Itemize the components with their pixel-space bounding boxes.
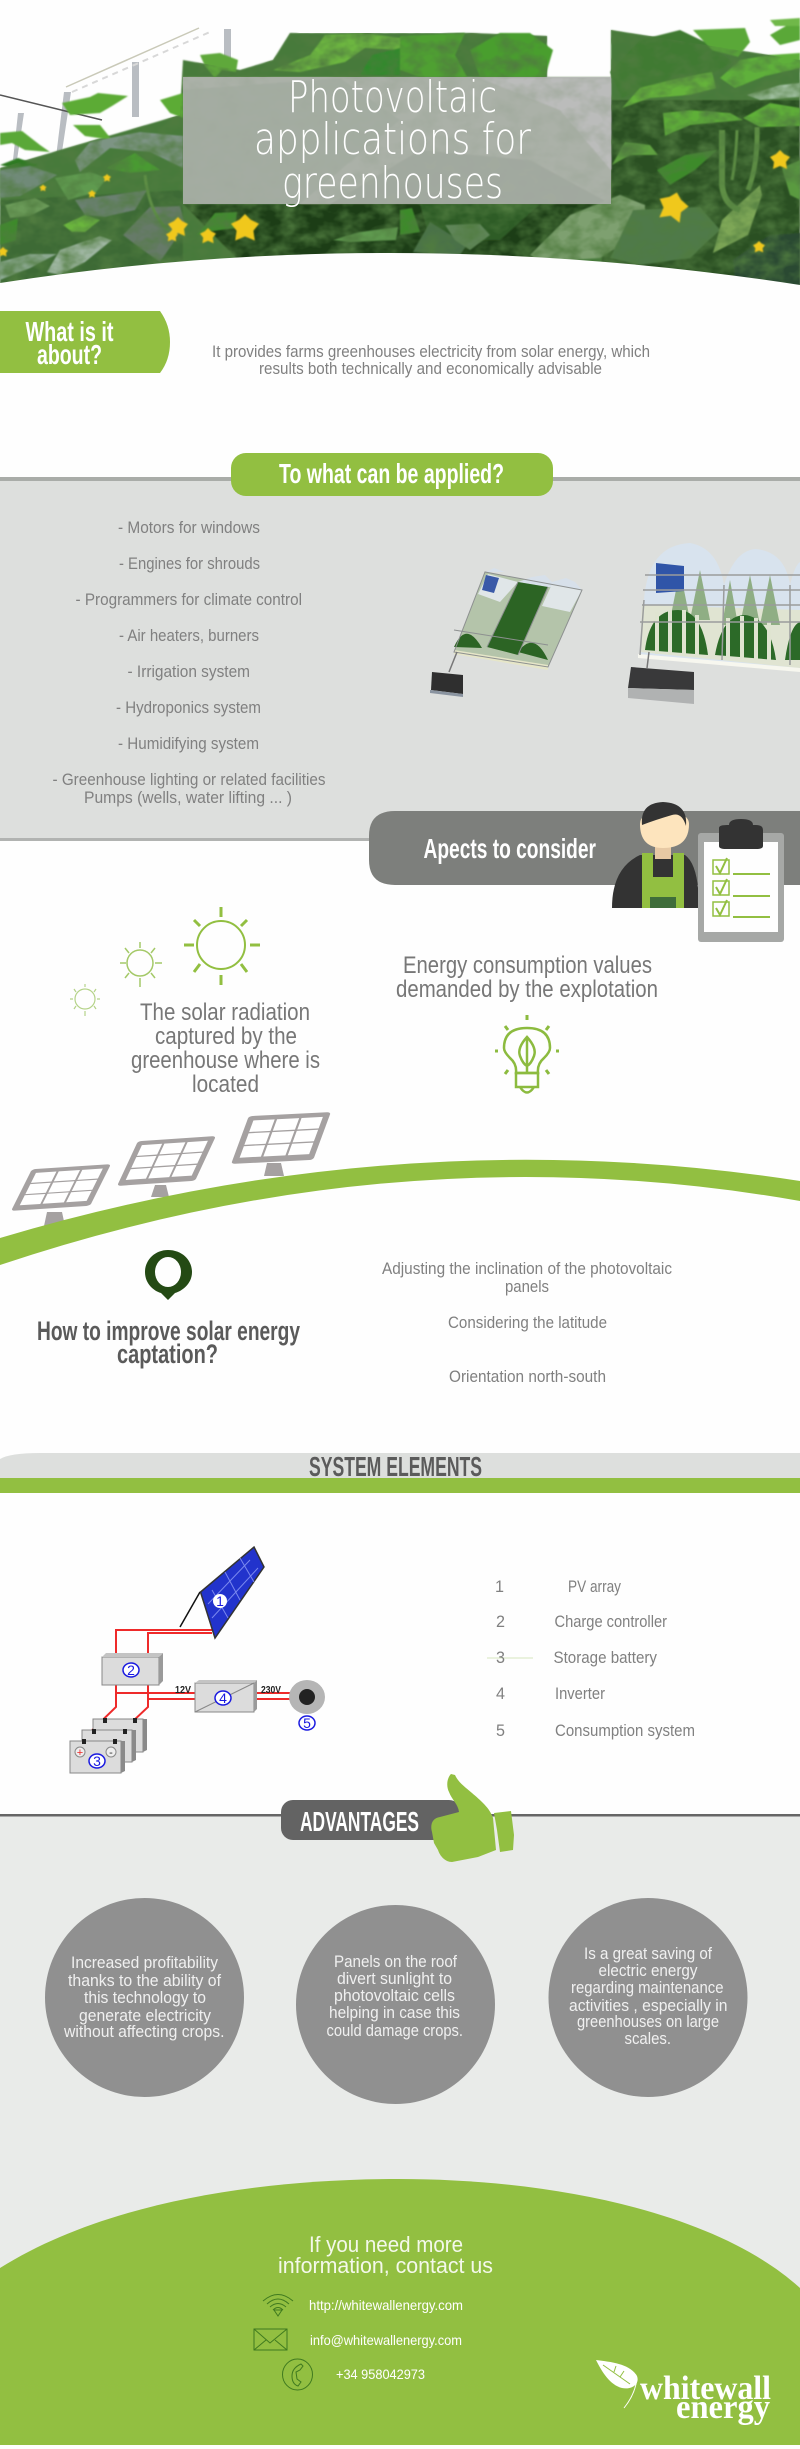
title box: applications for [254, 114, 532, 165]
header bar: Aspects to consider: Apects to consider [424, 833, 596, 864]
text: improvement measures: Orientation north-south [449, 1367, 606, 1386]
legend: system elements: 3 [496, 1648, 505, 1667]
text: solar radiation: greenhouse where is [131, 1047, 320, 1074]
logo: whitewall energy [596, 2360, 771, 2426]
text: solar radiation: located [192, 1071, 259, 1098]
text: description [212, 342, 650, 378]
panel: advantages [0, 1774, 800, 2445]
heading: contact: information, contact us [278, 2253, 493, 2278]
legend: system elements: 5 [496, 1721, 505, 1740]
charge controller: 2 [127, 1662, 135, 1678]
circle: advantage one [45, 1898, 244, 2097]
text: description: results both technically and economically advisable [259, 359, 602, 378]
legend: system elements: 4 [496, 1684, 505, 1703]
icon: solar panels [11, 1112, 331, 1226]
text: solar radiation: captured by the [155, 1023, 297, 1050]
legend: system elements: 1 [495, 1577, 504, 1596]
inverter [175, 1680, 281, 1712]
heading band: system elements [0, 1451, 800, 1493]
circle: advantage three: greenhouses on large [577, 2012, 719, 2031]
batteries: + [77, 1747, 83, 1759]
label: What is it about?: What is it [26, 316, 114, 347]
icon: envelope [254, 2329, 287, 2350]
heading pill: To what can be applied? [231, 453, 553, 496]
photo: yellow cucumber flowers [0, 150, 790, 256]
photo: leaf mottling [0, 20, 800, 290]
list of applications: - Humidifying system [118, 734, 259, 753]
logo: whitewall energy: energy [676, 2389, 770, 2426]
icon: wifi [263, 2294, 293, 2316]
legend: system elements: Charge controller [554, 1612, 667, 1631]
heading: how to improve: How to improve solar energy [37, 1316, 300, 1346]
text: improvement measures: panels [505, 1277, 549, 1296]
list of applications: - Engines for shrouds [119, 554, 260, 573]
list of applications: - Programmers for climate control [76, 590, 302, 609]
circle: advantage two: divert sunlight to [337, 1969, 452, 1988]
circle: advantage two [296, 1905, 495, 2104]
photo: mid and lower leaves [0, 127, 800, 290]
PV array: 1 [216, 1593, 224, 1609]
photo: posts and wires [0, 28, 626, 165]
consumption socket [289, 1680, 325, 1731]
text: energy consumption: Energy consumption values [403, 952, 652, 979]
icon: light bulb with leaf [495, 1015, 559, 1092]
hero: greenhouse cucumber plant photo [0, 17, 800, 285]
circle: advantage one: generate electricity [79, 2006, 211, 2025]
title box: Photovoltaic [288, 72, 497, 123]
image: small greenhouse with solar box [430, 568, 582, 697]
wires [84, 1630, 291, 1738]
icon: clipboard checklist [698, 819, 784, 942]
legend: system elements: PV array [568, 1577, 621, 1596]
green arc [0, 1160, 800, 1265]
consumption socket: 5 [303, 1715, 311, 1731]
circle: advantage two: could damage crops. [326, 2021, 463, 2040]
title box [183, 72, 611, 209]
text: improvement measures: Considering the latitude [448, 1313, 607, 1332]
list of applications: - Air heaters, burners [119, 626, 259, 645]
label: What is it about?: about? [37, 339, 102, 370]
icon: phone [282, 2359, 312, 2390]
text: phone: +34 958042973 [336, 2366, 425, 2382]
icon: map marker [145, 1250, 192, 1300]
circle: advantage one: Increased profitability [71, 1953, 218, 1972]
circle: advantage two: Panels on the roof [334, 1952, 457, 1971]
legend: system elements [487, 1577, 695, 1740]
heading: contact [278, 2232, 493, 2278]
circle: advantage three: scales. [624, 2029, 671, 2048]
diagram: photovoltaic system [70, 1547, 325, 1773]
title box: greenhouses [282, 158, 503, 209]
charge controller [102, 1653, 163, 1685]
circle: advantage three: regarding maintenance [571, 1978, 724, 1997]
header bar: Aspects to consider [369, 811, 800, 885]
icon: big sun [184, 907, 260, 985]
PV array [180, 1547, 264, 1638]
white curve over photo bottom [0, 253, 800, 480]
batteries [70, 1718, 147, 1773]
text: energy consumption: demanded by the explotation [396, 976, 658, 1003]
list of applications: Pumps (wells, water lifting ... ) [84, 788, 292, 807]
list of applications: - Hydroponics system [116, 698, 261, 717]
circle: advantage one: this technology to [84, 1988, 206, 2007]
text: improvement measures: Adjusting the inclination of the photovoltaic [382, 1259, 672, 1278]
footer: contact [0, 2179, 800, 2445]
circle: advantage three: activities , especially in [569, 1996, 728, 2015]
list of applications [52, 518, 326, 807]
legend: system elements: Storage battery [554, 1648, 657, 1667]
heading: how to improve: captation? [117, 1339, 218, 1369]
icon: thumbs up [431, 1774, 514, 1862]
inverter: 4 [219, 1690, 227, 1706]
heading band: system elements: SYSTEM ELEMENTS [309, 1451, 482, 1482]
circle: advantage one: thanks to the ability of [68, 1971, 221, 1990]
photo: foliage mass [0, 30, 800, 290]
image: large greenhouse with solar box [628, 543, 800, 704]
legend: system elements: 2 [496, 1612, 505, 1631]
batteries: - [109, 1747, 113, 1759]
panel: applications [0, 453, 800, 841]
text: improvement measures [382, 1259, 672, 1386]
heading: how to improve [37, 1316, 300, 1369]
text: website: http://whitewallenergy.com [309, 2297, 463, 2313]
text: solar radiation: The solar radiation [140, 999, 310, 1026]
heading: contact: If you need more [309, 2232, 463, 2257]
heading pill: To what can be applied?: To what can be applied? [279, 458, 504, 489]
circle: advantage two: photovoltaic cells [334, 1986, 455, 2005]
list of applications: - Greenhouse lighting or related facilities [52, 770, 326, 789]
text: email: info@whitewallenergy.com [310, 2332, 462, 2348]
heading: advantages: ADVANTAGES [300, 1806, 419, 1837]
icon: farmer with green vest [612, 802, 699, 908]
legend: system elements: Consumption system [555, 1721, 695, 1740]
circle: advantage three: electric energy [598, 1961, 698, 1980]
heading: advantages [281, 1800, 461, 1840]
legend: system elements: Inverter [555, 1684, 605, 1703]
logo: whitewall energy: whitewall [640, 2370, 771, 2407]
circle: advantage three: Is a great saving of [584, 1944, 712, 1963]
circle: advantage one: without affecting crops. [63, 2022, 225, 2041]
inverter: 230V [261, 1685, 281, 1696]
label: What is it about? [0, 311, 170, 373]
circle: advantage three [548, 1898, 748, 2097]
icon: small sun [70, 984, 100, 1016]
list of applications: - Motors for windows [118, 518, 260, 537]
text: energy consumption [396, 952, 658, 1003]
photo: upper bright leaves [62, 18, 800, 140]
circle: advantage two: helping in case this [329, 2003, 460, 2022]
text: solar radiation [131, 999, 320, 1098]
text: description: It provides farms greenhouses electricity from solar energy, which [212, 342, 650, 361]
batteries: 3 [93, 1753, 101, 1769]
inverter: 12V [175, 1685, 191, 1696]
icon: medium sun [120, 942, 162, 987]
list of applications: - Irrigation system [128, 662, 250, 681]
